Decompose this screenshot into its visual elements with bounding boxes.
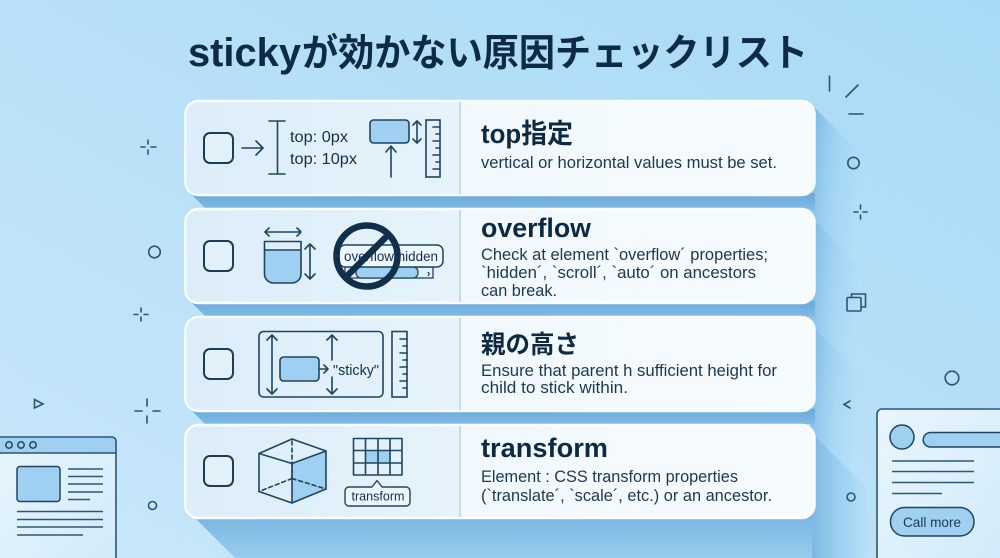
- icon: transform grid: transform: [352, 490, 404, 504]
- icon: overflow hidden prohibited: [336, 226, 443, 286]
- checkbox: [204, 133, 233, 163]
- checkbox: [204, 456, 233, 486]
- title: が効かない原因チェックリスト: [302, 33, 808, 75]
- description: [481, 362, 778, 397]
- description: Ensure that parent h sufficient height for: [481, 362, 778, 380]
- description: vertical or horizontal values must be set.: [481, 154, 777, 172]
- panel: top指定: [186, 101, 814, 195]
- description: (`translate´, `scale´, etc.) or an ancestor.: [481, 487, 772, 505]
- icon: transform grid: [345, 438, 410, 506]
- panel: transform: [186, 425, 814, 518]
- description: can break.: [481, 282, 557, 300]
- button: [890, 508, 974, 536]
- browser window illustration: [0, 437, 116, 558]
- icon: parent height diagram: [259, 332, 407, 397]
- icon: top offset diagram: top: 10px: [290, 151, 357, 168]
- description: [481, 468, 772, 505]
- checkbox: [204, 349, 233, 379]
- icon: cube: [259, 439, 326, 503]
- description: [481, 246, 768, 300]
- heading: transform: [481, 433, 608, 463]
- title: sticky: [188, 31, 302, 75]
- heading: top指定: [481, 119, 573, 149]
- icon: container with overflow arrows: [264, 228, 315, 283]
- icon: overflow hidden prohibited: ›: [427, 268, 430, 280]
- decorative marks: [34, 76, 959, 510]
- panel: 親の高さ: [186, 317, 814, 411]
- description: child to stick within.: [481, 379, 628, 397]
- panel: overflow: [186, 209, 814, 303]
- heading: 親の高さ: [481, 331, 579, 359]
- description: Check at element `overflow´ properties;: [481, 246, 768, 264]
- description: `hidden´, `scroll´, `auto´ on ancestors: [481, 264, 756, 282]
- button: Call more: [903, 514, 961, 530]
- icon: overflow hidden prohibited: overflow:hidden: [344, 248, 438, 264]
- card window illustration: [877, 409, 1000, 558]
- description: Element : CSS transform properties: [481, 468, 738, 486]
- long card shadows: [190, 103, 870, 558]
- checkbox: [204, 241, 233, 271]
- icon: top offset diagram: top: 0px: [290, 129, 348, 146]
- icon: parent height diagram: "sticky": [333, 362, 379, 379]
- icon: top offset diagram: [242, 120, 440, 177]
- heading: overflow: [481, 213, 592, 243]
